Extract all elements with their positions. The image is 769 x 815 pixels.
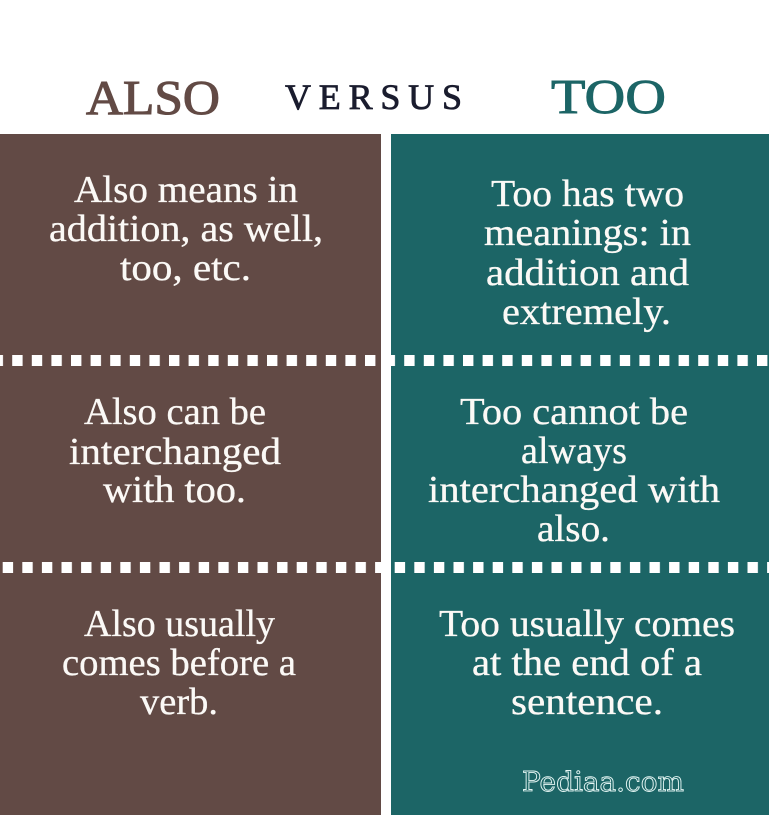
text: too interchange	[428, 391, 720, 550]
text: too position: Too usually comes	[439, 603, 735, 645]
text: also position: comes before a	[62, 642, 296, 684]
text: too interchange: Too cannot be	[460, 391, 688, 433]
logo: Pediaa.com: Pediaa.com	[522, 767, 684, 798]
text: also interchange	[69, 391, 281, 511]
text: too interchange: always	[521, 430, 627, 472]
text: too position: at the end of a	[472, 642, 702, 684]
text: too interchange: interchanged with	[428, 469, 720, 511]
text: also meaning	[49, 169, 323, 289]
text: also position: verb.	[140, 681, 218, 723]
text: also position: Also usually	[84, 603, 275, 645]
text: also meaning: Also means in	[74, 169, 298, 211]
text: too position: sentence.	[511, 681, 663, 723]
text: too interchange: also.	[537, 508, 610, 550]
text: also meaning: addition, as well,	[49, 208, 323, 250]
text: too meaning: extremely.	[502, 291, 671, 333]
text: too meaning	[484, 173, 691, 333]
heading: VERSUS: VERSUS	[285, 77, 462, 117]
text: too meaning: Too has two	[491, 173, 684, 215]
heading: ALSO: ALSO	[86, 70, 220, 125]
text: too meaning: meanings: in	[484, 212, 691, 254]
text: too position	[439, 603, 735, 723]
text: also interchange: interchanged	[69, 431, 281, 473]
text: also interchange: with too.	[103, 469, 246, 511]
heading: TOO: TOO	[551, 69, 666, 124]
panel: too	[391, 134, 769, 815]
text: also position	[62, 603, 296, 723]
text: also meaning: too, etc.	[120, 247, 251, 289]
text: too meaning: addition and	[486, 252, 689, 294]
panel: also	[0, 134, 381, 815]
text: also interchange: Also can be	[84, 391, 266, 433]
